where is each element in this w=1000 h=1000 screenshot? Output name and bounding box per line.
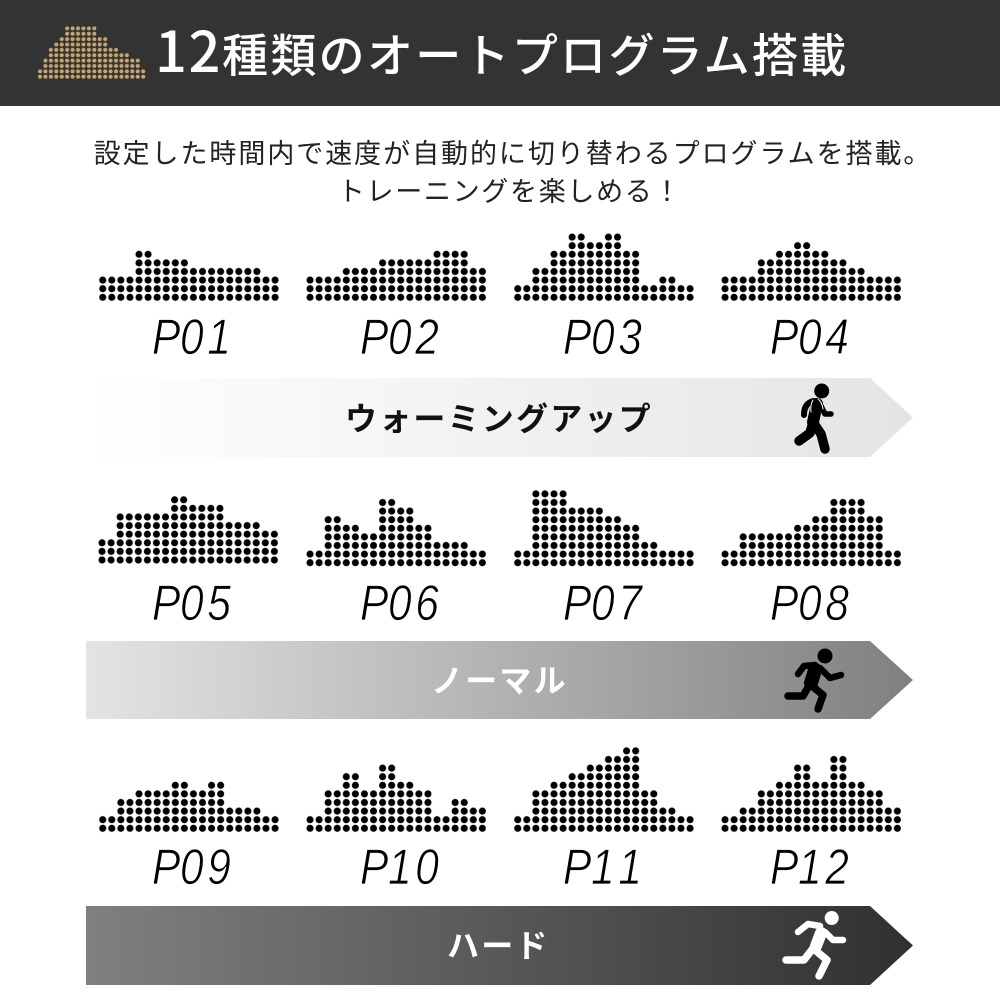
program P01 <box>98 250 280 365</box>
program P09 <box>98 781 280 895</box>
program P03 <box>513 233 695 365</box>
icon: walker <box>799 384 831 449</box>
label: warming up: ウォーミングアップ <box>345 394 653 440</box>
program P12 <box>720 755 902 895</box>
program P08 <box>720 498 902 631</box>
program P06: P06 <box>360 575 439 631</box>
label: hard: ハード <box>447 921 550 967</box>
program P10: P10 <box>360 839 439 895</box>
arrow: warming up <box>86 378 913 457</box>
program P04: P04 <box>770 309 849 365</box>
arrow: normal <box>86 641 913 719</box>
program P10 <box>306 764 487 895</box>
program P06 <box>306 498 487 631</box>
program P02 <box>306 250 487 365</box>
program P08: P08 <box>770 575 849 631</box>
program P11 <box>513 747 695 895</box>
program P11: P11 <box>563 839 642 895</box>
program P02: P02 <box>360 309 439 365</box>
arrow: hard <box>86 906 913 985</box>
icon: sprinter <box>786 911 843 976</box>
title: 12種類のオートプログラム搭載 <box>155 8 849 89</box>
program P09: P09 <box>152 839 231 895</box>
intro text: トレーニングを楽しめる！ <box>338 170 682 209</box>
program P03: P03 <box>563 309 642 365</box>
intro text: 設定した時間内で速度が自動的に切り替わるプログラムを搭載。 <box>94 132 932 171</box>
header band <box>0 0 1000 106</box>
label: normal: ノーマル <box>431 656 568 702</box>
icon: tan dot mountain <box>37 26 146 79</box>
icon: runner <box>788 648 841 709</box>
program P01: P01 <box>152 309 231 365</box>
program P07 <box>513 490 695 631</box>
program P05: P05 <box>152 575 231 631</box>
program P07: P07 <box>563 575 644 631</box>
program P12: P12 <box>770 839 849 895</box>
program P05 <box>98 496 279 631</box>
intro text <box>94 132 932 209</box>
program P04 <box>720 241 902 365</box>
